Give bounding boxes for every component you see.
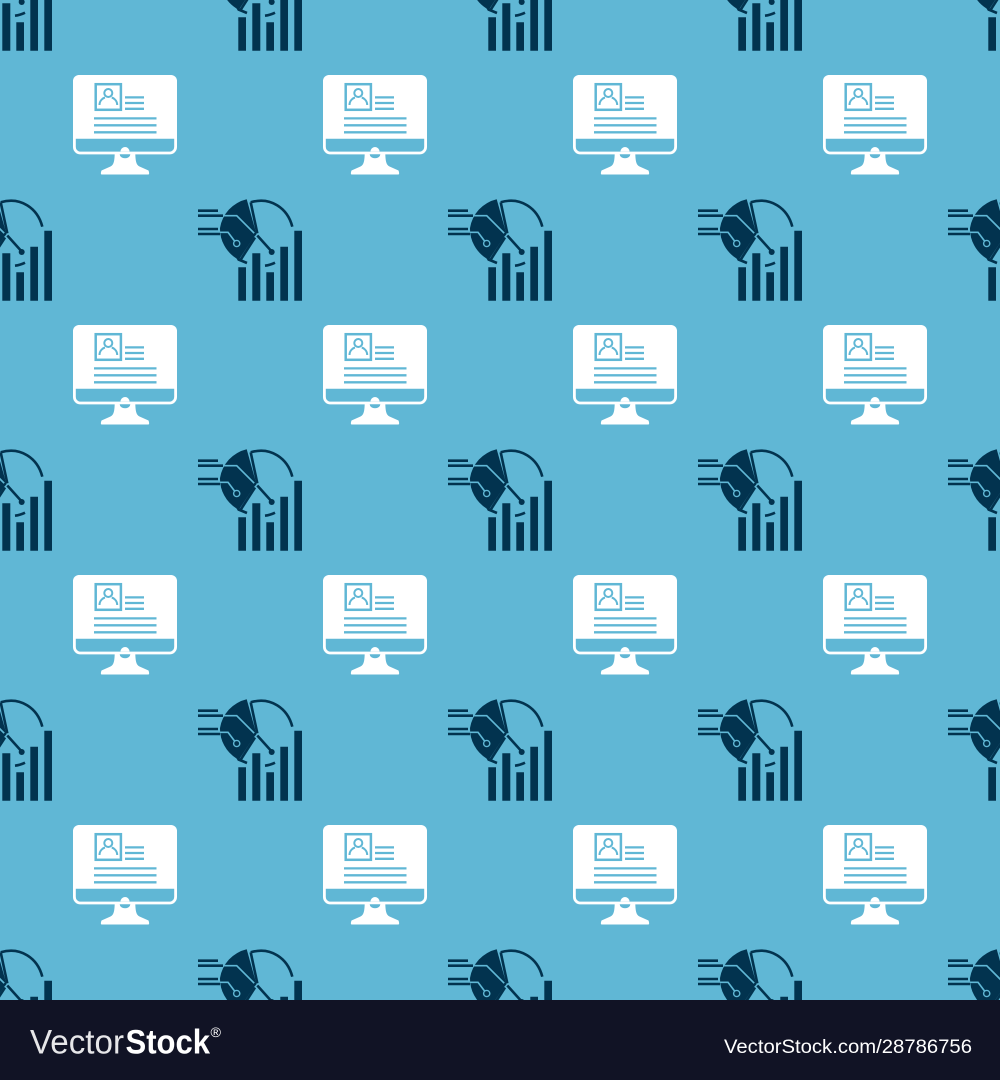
icon: pie and bar chart (198, 449, 302, 551)
icon: pie and bar chart (698, 449, 802, 551)
icon: pie and bar chart (198, 0, 302, 51)
icon: monitor with profile (823, 825, 927, 924)
logo: VectorStock: Vector (30, 1023, 124, 1061)
icon: pie and bar chart (0, 949, 52, 1051)
icon: pie and bar chart (698, 199, 802, 301)
icon: monitor with profile (323, 575, 427, 674)
footer bar (0, 1000, 1000, 1080)
pattern: monitor icons (73, 75, 927, 924)
icon: pie and bar chart (948, 0, 1000, 51)
icon: pie and bar chart (948, 449, 1000, 551)
icon: monitor with profile (573, 575, 677, 674)
icon: pie and bar chart (448, 449, 552, 551)
icon: pie and bar chart (448, 0, 552, 51)
icon: monitor with profile (823, 575, 927, 674)
icon: pie and bar chart (198, 949, 302, 1051)
icon: monitor with profile (573, 825, 677, 924)
icon: pie and bar chart (948, 949, 1000, 1051)
logo: VectorStock: Stock (126, 1023, 211, 1061)
icon: pie and bar chart (948, 699, 1000, 801)
icon: monitor with profile (323, 825, 427, 924)
icon: monitor with profile (323, 75, 427, 174)
icon: pie and bar chart (698, 949, 802, 1051)
source url: VectorStock.com/28786756 (724, 1036, 972, 1058)
icon: pie and bar chart (948, 199, 1000, 301)
icon: monitor with profile (823, 325, 927, 424)
icon: monitor with profile (573, 325, 677, 424)
icon: pie and bar chart (0, 699, 52, 801)
icon: monitor with profile (573, 75, 677, 174)
logo: VectorStock (30, 1023, 222, 1061)
icon: pie and bar chart (448, 699, 552, 801)
icon: pie and bar chart (0, 199, 52, 301)
icon: pie and bar chart (698, 0, 802, 51)
logo: VectorStock: ® (210, 1024, 222, 1040)
icon: monitor with profile (323, 325, 427, 424)
icon: monitor with profile (73, 575, 177, 674)
icon: monitor with profile (73, 325, 177, 424)
icon: pie and bar chart (448, 199, 552, 301)
icon: pie and bar chart (0, 449, 52, 551)
icon: monitor with profile (823, 75, 927, 174)
icon: pie and bar chart (198, 699, 302, 801)
icon: monitor with profile (73, 825, 177, 924)
icon: pie and bar chart (0, 0, 52, 51)
icon: pie and bar chart (198, 199, 302, 301)
icon: pie and bar chart (698, 699, 802, 801)
icon: monitor with profile (73, 75, 177, 174)
icon: pie and bar chart (448, 949, 552, 1051)
